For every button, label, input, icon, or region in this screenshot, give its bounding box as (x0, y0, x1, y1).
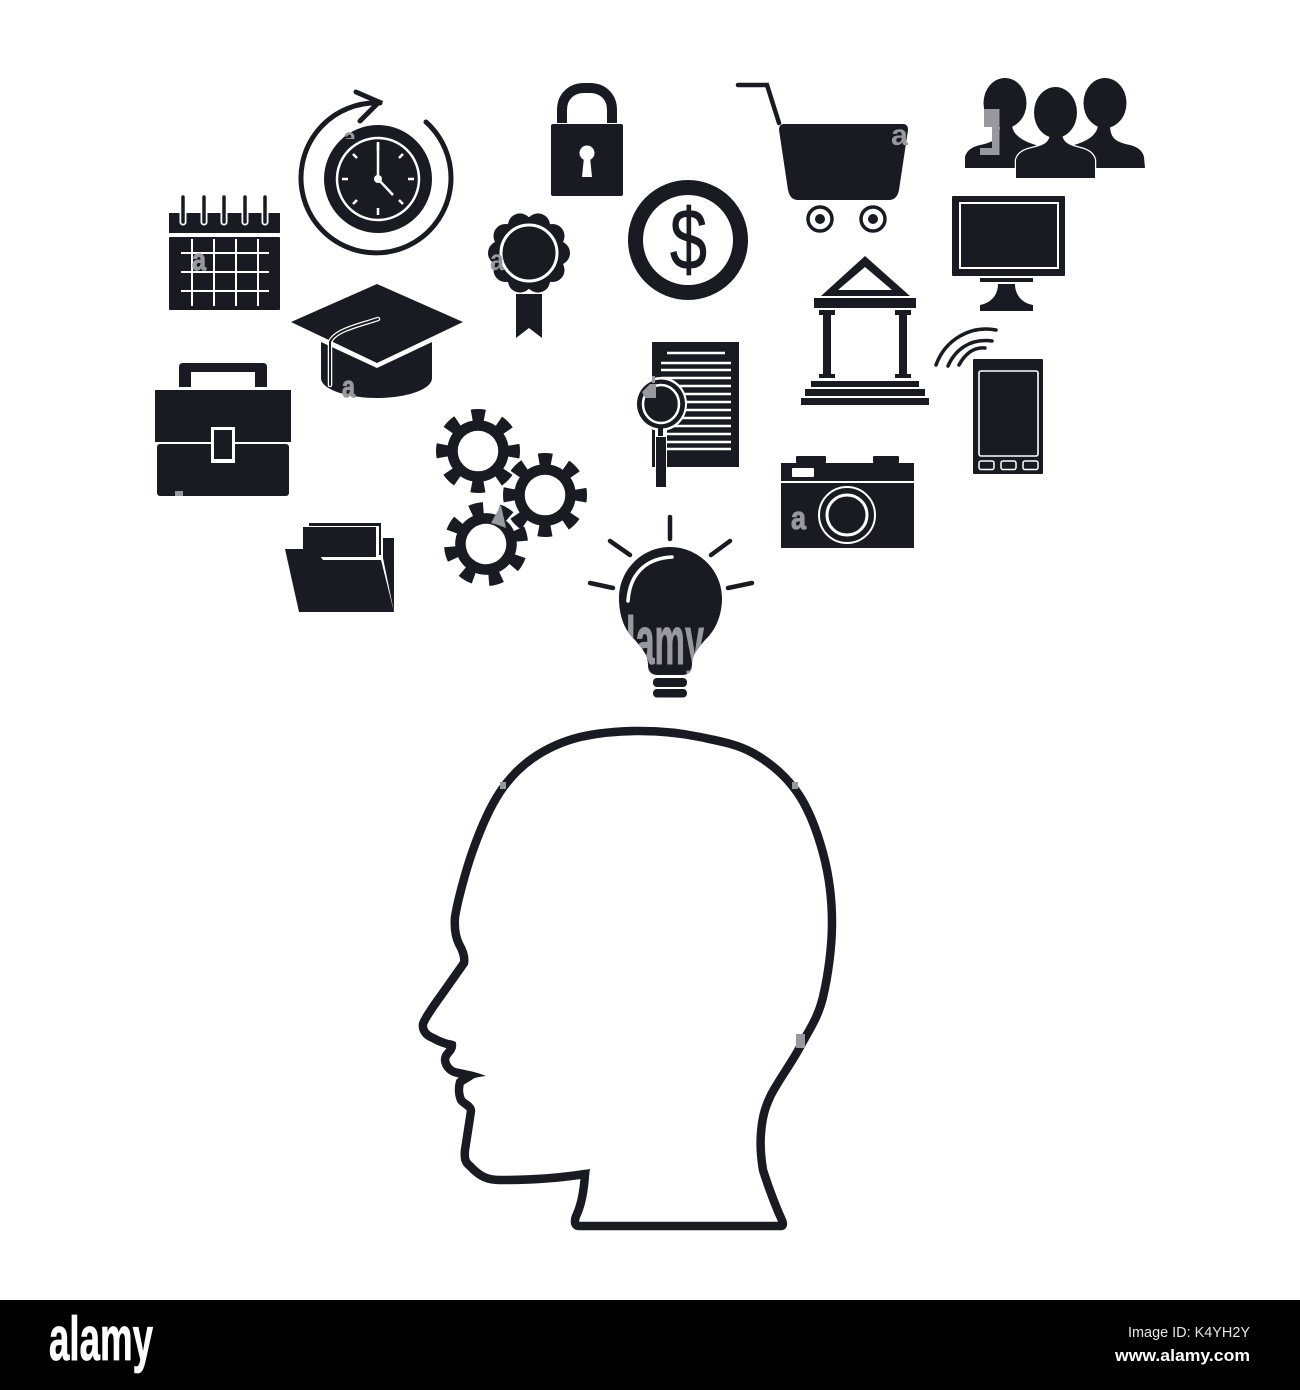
icon: light bulb (590, 517, 752, 698)
icon: shopping cart (738, 85, 908, 231)
footer bar (0, 1300, 1300, 1390)
icon: shopping cart: a (891, 119, 908, 152)
icon: group of people (965, 78, 1145, 178)
icon: camera: a (791, 500, 806, 536)
icon: award rosette: a (490, 244, 504, 277)
head silhouette outline (423, 731, 832, 1226)
icon: bank building (801, 256, 929, 405)
icon: light bulb: alamy (607, 603, 704, 679)
icon: award rosette (488, 213, 570, 338)
image id: Image ID: K4YH2Y (1128, 1324, 1250, 1341)
icon: calendar: a (192, 242, 207, 277)
icon: graduation cap (291, 284, 463, 404)
alamy logo: alamy (49, 1305, 153, 1374)
icon: clock with circular arrow (301, 92, 451, 253)
icon: clock with circular arrow: a (343, 122, 356, 153)
icon: calendar (169, 197, 280, 310)
icon: graduation cap: a (342, 369, 356, 404)
website: www.alamy.com (1114, 1346, 1250, 1365)
icon: padlock (551, 88, 623, 196)
icon: dollar coin (636, 188, 740, 292)
icon: computer monitor (952, 196, 1065, 311)
icon: camera (781, 456, 914, 548)
icon: briefcase (155, 363, 291, 496)
icon: document with magnifier (635, 342, 739, 487)
icon: file folder (285, 523, 394, 612)
icon: gears (442, 415, 581, 588)
icon: dollar coin: $ (670, 192, 707, 288)
icon: smartphone with wifi (936, 329, 1043, 474)
